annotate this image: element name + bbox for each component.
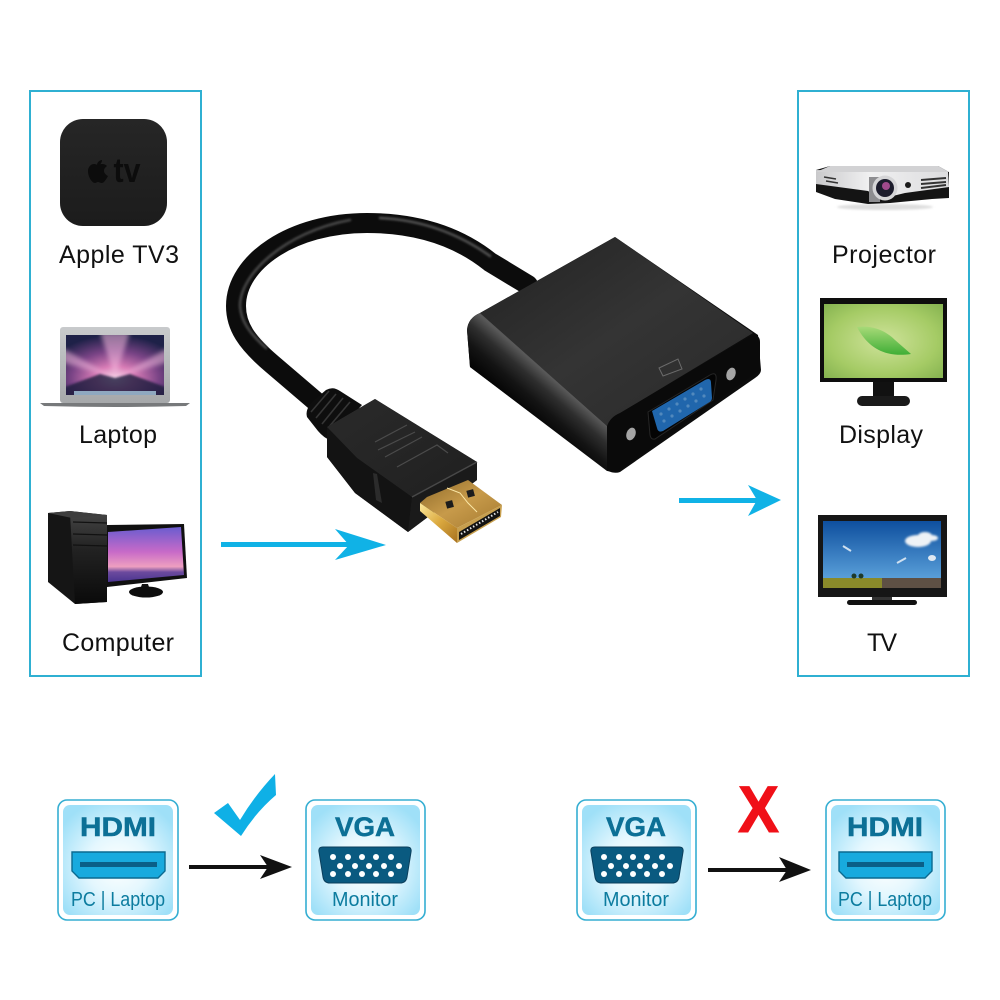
icon: desktop computer — [48, 511, 187, 604]
HDMI gold connector — [420, 480, 502, 543]
screw right — [725, 366, 737, 382]
label: Apple TV3: Apple TV3 — [59, 241, 179, 269]
HDMI plug body — [327, 399, 502, 543]
card: HDMI PC Laptop source — [58, 800, 178, 920]
icon: television — [818, 515, 947, 605]
card: VGA Monitor target: Monitor — [332, 889, 398, 911]
card: VGA Monitor source: Monitor — [603, 889, 669, 911]
icon: Apple TV — [60, 119, 167, 226]
infographic canvas — [29, 90, 970, 921]
arrow: VGA to HDMI — [708, 857, 811, 882]
card: HDMI PC Laptop target: PC | Laptop — [838, 889, 932, 911]
VGA screen glyph — [659, 359, 682, 376]
cable — [236, 218, 528, 405]
icon: red X: X — [738, 772, 779, 846]
icon: display monitor — [820, 298, 947, 406]
icon: Apple TV: tv — [114, 152, 141, 190]
arrow: HDMI to VGA — [189, 855, 292, 879]
label: Display: Display — [839, 421, 924, 449]
card: VGA Monitor source: VGA — [606, 812, 666, 842]
label: Projector: Projector — [832, 241, 936, 269]
card: VGA Monitor target: VGA — [335, 812, 395, 842]
icon: projector — [816, 166, 949, 210]
card: HDMI PC Laptop target: HDMI — [847, 812, 923, 842]
label: Laptop: Laptop — [79, 421, 157, 449]
label: TV: TV — [867, 629, 897, 657]
icon: laptop — [40, 327, 190, 407]
VGA adapter box — [467, 237, 761, 473]
arrow: input to adapter — [221, 529, 386, 560]
card: HDMI PC Laptop source: HDMI — [80, 812, 156, 842]
card: HDMI PC Laptop target — [826, 800, 945, 920]
card: VGA Monitor target — [306, 800, 425, 920]
card: VGA Monitor source — [577, 800, 696, 920]
icon: blue check mark — [214, 774, 276, 836]
screw left — [625, 426, 637, 442]
label: Computer: Computer — [62, 629, 174, 657]
arrow: adapter to output — [679, 485, 781, 516]
card: HDMI PC Laptop source: PC | Laptop — [71, 889, 165, 911]
VGA blue port — [648, 374, 716, 439]
panel: input devices — [30, 91, 201, 676]
strain relief of HDMI plug — [307, 388, 362, 440]
panel: output devices — [798, 91, 969, 676]
